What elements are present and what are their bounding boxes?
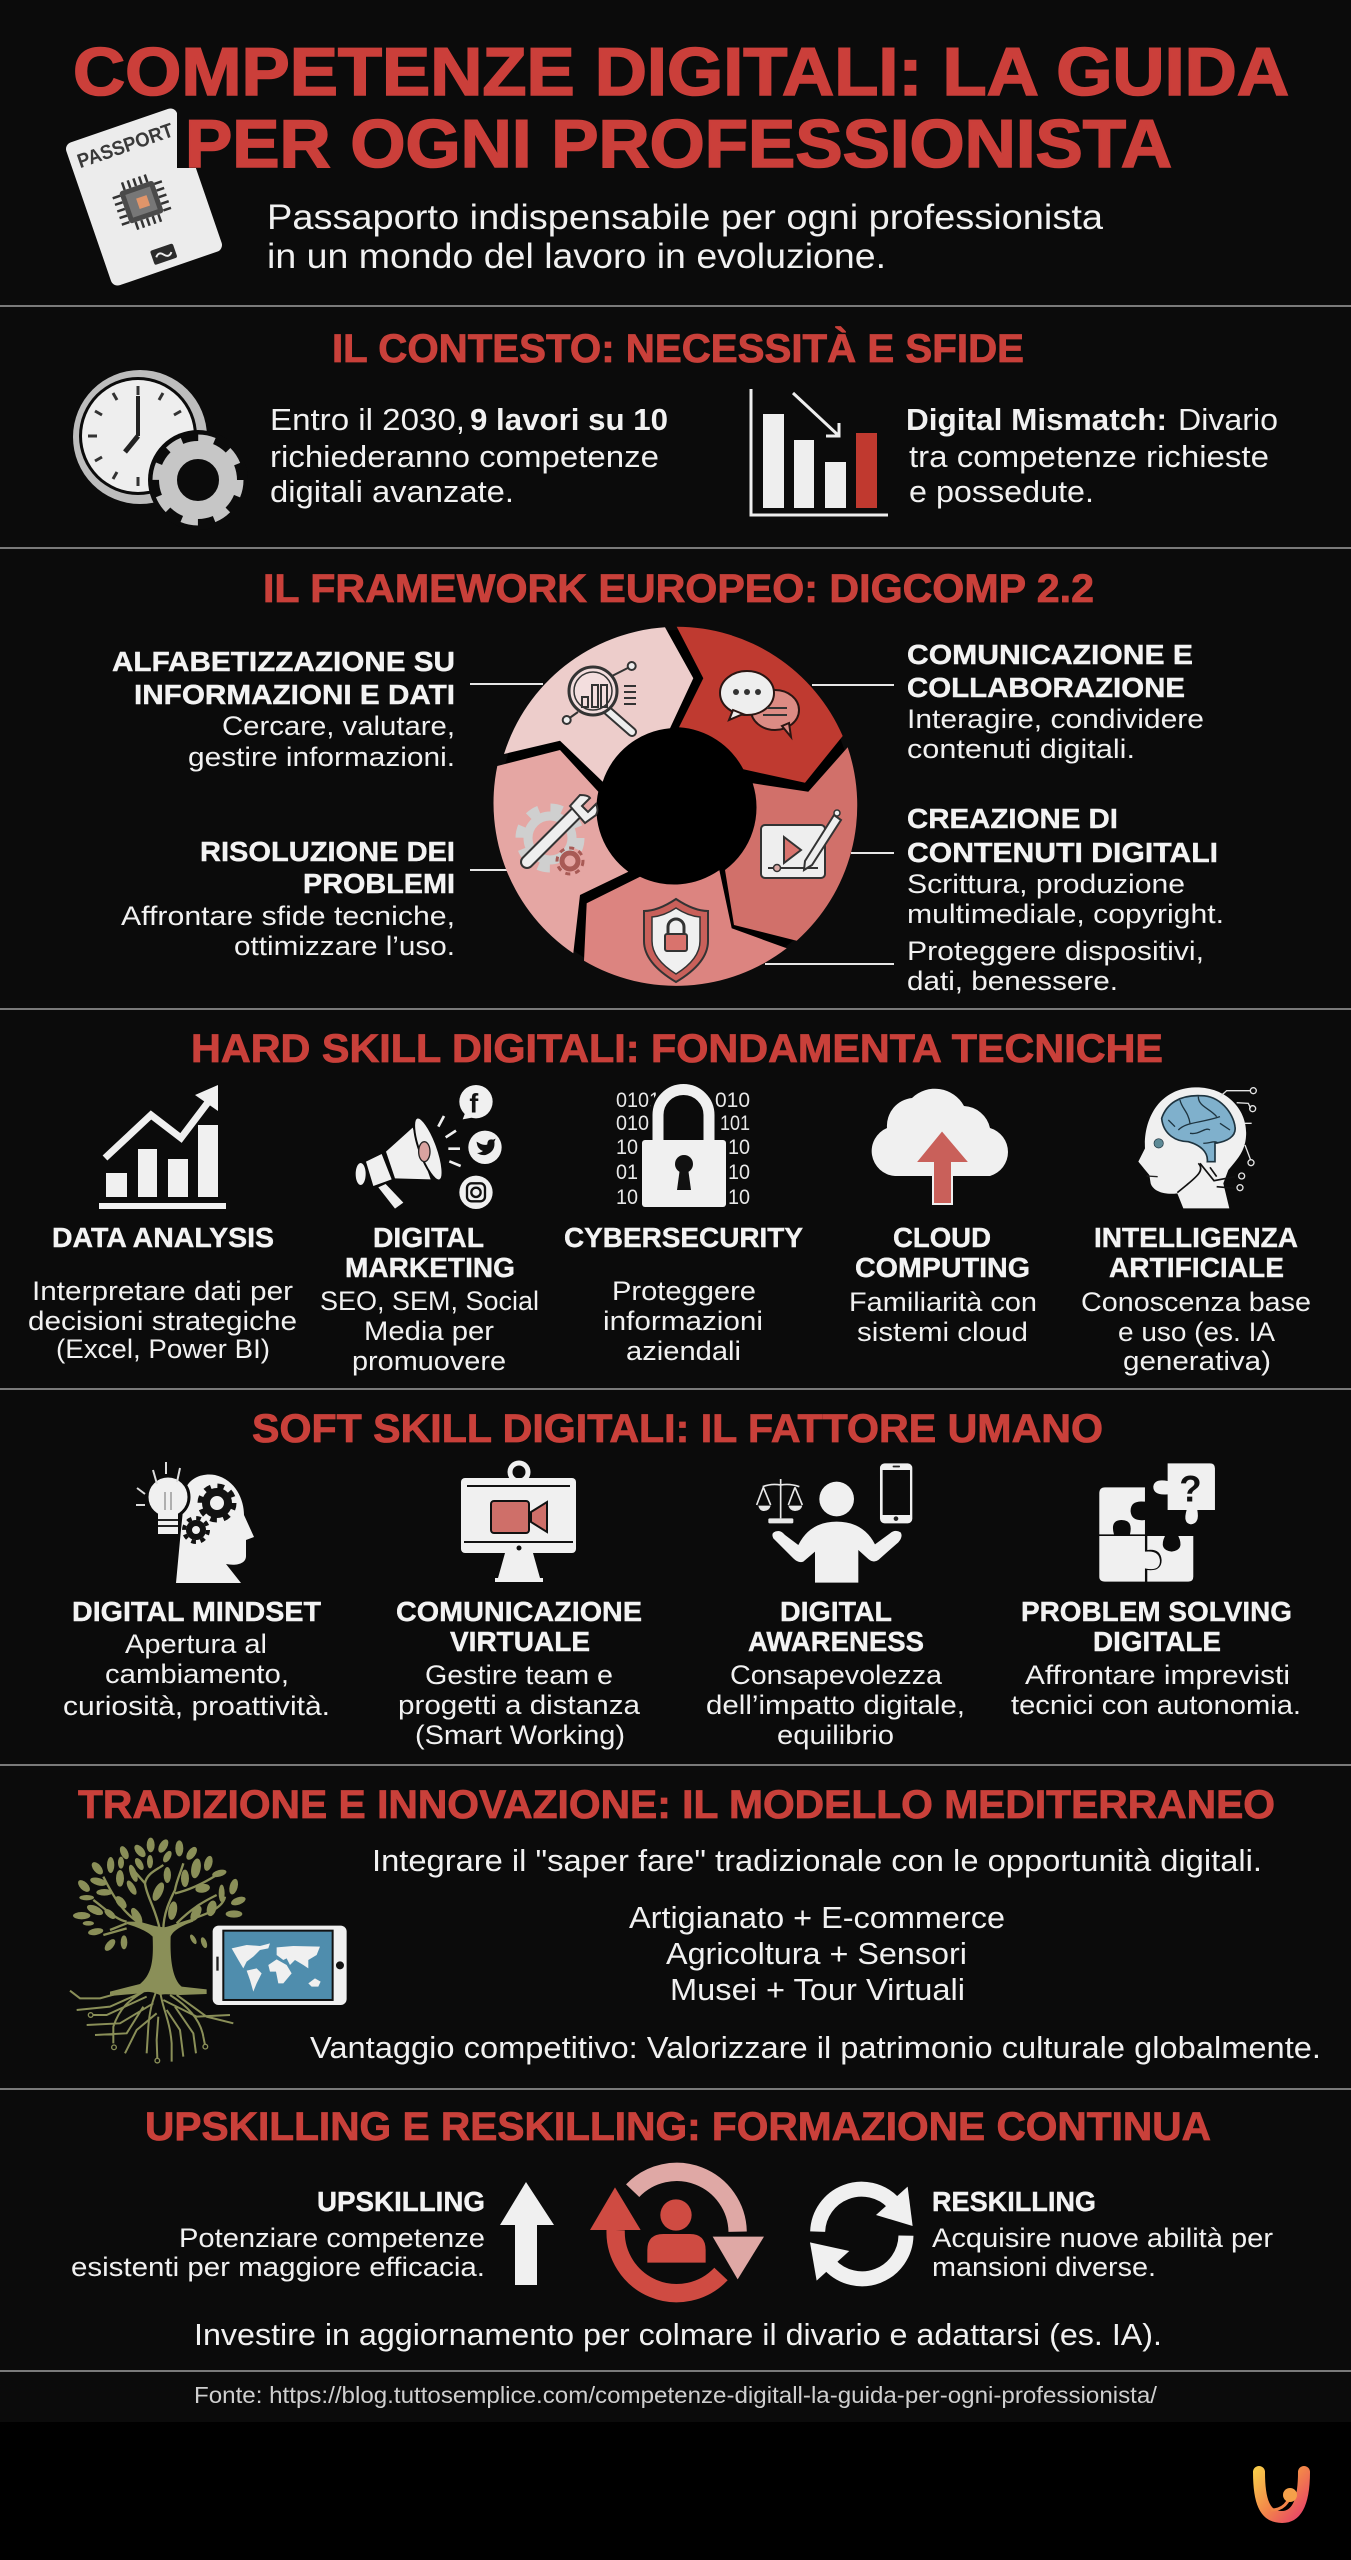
heading: upskilling: UPSKILLING E RESKILLING: FORMAZIONE CONTINUA bbox=[145, 2105, 1211, 2149]
heading: framework: IL FRAMEWORK EUROPEO: DIGCOMP 2.2 bbox=[263, 567, 1094, 611]
title: PER OGNI PROFESSIONISTA bbox=[185, 106, 1172, 182]
text: digital marketing: promuovere bbox=[352, 1346, 506, 1376]
icon: cloud upload bbox=[872, 1089, 1008, 1204]
text: digital marketing: SEO, SEM, Social bbox=[320, 1286, 539, 1316]
icon: megaphone with social bbox=[356, 1085, 502, 1209]
icon: padlock with binary: 101 bbox=[720, 1112, 750, 1135]
text: data analysis: decisioni strategiche bbox=[28, 1306, 297, 1336]
icon: magnifier with data bbox=[563, 662, 636, 732]
text: digital mismatch: tra competenze richieste bbox=[909, 439, 1269, 474]
text: combinations bbox=[629, 1900, 1005, 2007]
text: digital mismatch: Digital Mismatch: bbox=[906, 402, 1167, 437]
text: digital mismatch: Divario bbox=[1178, 402, 1278, 437]
text: cloud computing bbox=[849, 1222, 1037, 1347]
text: digital mindset: DIGITAL MINDSET bbox=[72, 1596, 321, 1627]
text: cloud computing: COMPUTING bbox=[855, 1252, 1030, 1283]
icon: monitor with video call bbox=[461, 1463, 576, 1582]
text: data analysis: Interpretare dati per bbox=[32, 1276, 293, 1306]
text: reskilling: RESKILLING bbox=[932, 2186, 1096, 2217]
text: digital awareness: DIGITAL bbox=[780, 1596, 892, 1627]
heading: tradizione: TRADIZIONE E INNOVAZIONE: IL MODELLO MEDITERRANEO bbox=[78, 1783, 1275, 1827]
label: creazione di contenuti digitali: CONTENUTI DIGITALI bbox=[907, 837, 1218, 868]
text: 2030: richiederanno competenze bbox=[270, 439, 659, 474]
text: combinations: Agricoltura + Sensori bbox=[666, 1936, 967, 1971]
icon: tablet with world map bbox=[213, 1926, 347, 2005]
text: comunicazione virtuale: COMUNICAZIONE bbox=[396, 1596, 642, 1627]
icon: clock and gear bbox=[73, 370, 248, 530]
label: creazione di contenuti digitali: Scrittura, produzione bbox=[907, 869, 1185, 899]
icon: padlock with binary: 10 bbox=[616, 1136, 638, 1159]
text: problem solving digitale: PROBLEM SOLVING bbox=[1021, 1596, 1292, 1627]
arrow: up bbox=[500, 2182, 554, 2285]
text: comunicazione virtuale bbox=[396, 1596, 642, 1750]
text: combinations: Musei + Tour Virtuali bbox=[670, 1972, 965, 2007]
text: upskilling: UPSKILLING bbox=[317, 2186, 485, 2217]
text: digital awareness bbox=[706, 1596, 965, 1750]
text: intelligenza artificiale bbox=[1081, 1222, 1311, 1376]
icon: padlock with binary: 0101 bbox=[616, 1089, 660, 1112]
panel: hard skill bbox=[28, 1027, 1311, 1376]
text: intelligenza artificiale: ARTIFICIALE bbox=[1109, 1252, 1284, 1283]
text: digital awareness: Consapevolezza bbox=[730, 1660, 943, 1690]
label: comunicazione e collaborazione: COMUNICAZIONE E bbox=[907, 639, 1193, 670]
text: digital mindset bbox=[63, 1596, 330, 1721]
text: digital mismatch: e possedute. bbox=[909, 474, 1094, 509]
text: intelligenza artificiale: Conoscenza base bbox=[1081, 1287, 1311, 1317]
title: COMPETENZE DIGITALI: LA GUIDA bbox=[73, 34, 1289, 110]
label: comunicazione e collaborazione: contenuti digitali. bbox=[907, 734, 1135, 764]
icon: megaphone with social: f bbox=[469, 1089, 478, 1119]
text: cybersecurity: informazioni bbox=[603, 1306, 763, 1336]
text: comunicazione virtuale: VIRTUALE bbox=[450, 1626, 590, 1657]
text: cybersecurity bbox=[564, 1222, 803, 1366]
label: alfabetizzazione bbox=[112, 646, 455, 772]
heading: soft skill: SOFT SKILL DIGITALI: IL FATTORE UMANO bbox=[252, 1407, 1103, 1451]
text: cloud computing: CLOUD bbox=[893, 1222, 991, 1253]
text: digital mindset: curiosità, proattività. bbox=[63, 1691, 330, 1721]
icon: olive tree with circuit roots bbox=[70, 1838, 247, 2063]
text: vantaggio competitivo: Vantaggio competitivo: Valorizzare il patrimonio culturale globalmente. bbox=[310, 2030, 1321, 2065]
text: cybersecurity: CYBERSECURITY bbox=[564, 1222, 803, 1253]
icon: wrench and gear bbox=[520, 795, 598, 874]
text: digital marketing: Media per bbox=[364, 1316, 494, 1346]
text: digital marketing bbox=[320, 1222, 539, 1376]
text: digital awareness: dell’impatto digitale, bbox=[706, 1690, 965, 1720]
icon: puzzle with question mark: ? bbox=[1179, 1469, 1202, 1510]
text: cybersecurity: Proteggere bbox=[612, 1276, 756, 1306]
icon: brand logo bbox=[1259, 2472, 1304, 2517]
label: creazione di contenuti digitali bbox=[907, 803, 1224, 929]
text: intelligenza artificiale: generativa) bbox=[1123, 1346, 1271, 1376]
icon: head with bulb and gears bbox=[136, 1462, 254, 1583]
panel: soft skill bbox=[63, 1407, 1301, 1750]
text: data analysis: (Excel, Power BI) bbox=[56, 1334, 270, 1364]
icon: chat bubbles bbox=[720, 671, 799, 737]
subtitle bbox=[267, 198, 1104, 276]
label: sicurezza: dati, benessere. bbox=[907, 966, 1118, 996]
label: risoluzione dei problemi: ottimizzare l’uso. bbox=[234, 931, 455, 961]
icon: padlock with binary: 01 bbox=[616, 1161, 638, 1184]
icon: passport bbox=[64, 100, 224, 287]
heading: hard skill: HARD SKILL DIGITALI: FONDAMENTA TECNICHE bbox=[191, 1027, 1163, 1071]
label: comunicazione e collaborazione bbox=[907, 639, 1204, 764]
label: risoluzione dei problemi: Affrontare sfide tecniche, bbox=[121, 901, 455, 931]
icon: passport: PASSPORT bbox=[75, 120, 176, 173]
icon: ai head bbox=[1138, 1087, 1256, 1208]
text: 2030: 9 lavori su 10 bbox=[470, 402, 668, 437]
text: problem solving digitale: tecnici con autonomia. bbox=[1011, 1690, 1301, 1720]
text: digital awareness: equilibrio bbox=[777, 1720, 894, 1750]
icon: padlock with binary: 010 bbox=[616, 1112, 649, 1135]
icon: padlock with binary: 10 bbox=[728, 1136, 750, 1159]
icon: shield with lock bbox=[644, 899, 708, 982]
text: intelligenza artificiale: INTELLIGENZA bbox=[1094, 1222, 1298, 1253]
text: digital mindset: cambiamento, bbox=[105, 1659, 289, 1689]
subtitle: Passaporto indispensabile per ogni professionista bbox=[267, 198, 1104, 237]
label: risoluzione dei problemi bbox=[121, 836, 455, 961]
text: reskilling bbox=[932, 2186, 1273, 2282]
text: cloud computing: Familiarità con bbox=[849, 1287, 1037, 1317]
panel: upskilling e reskilling bbox=[71, 2105, 1273, 2352]
text: 2030: Entro il 2030, bbox=[270, 402, 465, 437]
label: comunicazione e collaborazione: COLLABORAZIONE bbox=[907, 672, 1185, 703]
footer: source: Fonte: https://blog.tuttosemplice.com/competenze-digitall-la-guida-per-ogni-professionista/ bbox=[194, 2382, 1158, 2408]
text: 2030 bbox=[270, 402, 668, 509]
heading: contesto: IL CONTESTO: NECESSITÀ E SFIDE bbox=[332, 326, 1024, 371]
label: alfabetizzazione: ALFABETIZZAZIONE SU bbox=[112, 646, 455, 677]
text: combinations: Artigianato + E-commerce bbox=[629, 1900, 1005, 1935]
subtitle: in un mondo del lavoro in evoluzione. bbox=[267, 237, 886, 276]
text: upskilling: Potenziare competenze bbox=[179, 2223, 485, 2253]
icon: padlock with binary: 010 bbox=[715, 1089, 750, 1112]
text: upskilling bbox=[71, 2186, 485, 2282]
icon: puzzle with question mark bbox=[1099, 1463, 1215, 1582]
text: comunicazione virtuale: (Smart Working) bbox=[415, 1720, 625, 1750]
text: investire: Investire in aggiornamento per colmare il divario e adattarsi (es. IA). bbox=[194, 2317, 1162, 2352]
label: risoluzione dei problemi: RISOLUZIONE DEI bbox=[200, 836, 455, 867]
title bbox=[73, 34, 1289, 182]
icon: bar chart mismatch bbox=[751, 389, 888, 515]
text: reskilling: Acquisire nuove abilità per bbox=[932, 2223, 1273, 2253]
label: sicurezza: Proteggere dispositivi, bbox=[907, 936, 1204, 966]
text: comunicazione virtuale: progetti a distanza bbox=[398, 1690, 641, 1720]
text: data analysis bbox=[28, 1222, 297, 1364]
text: digital marketing: MARKETING bbox=[345, 1252, 515, 1283]
label: alfabetizzazione: gestire informazioni. bbox=[188, 742, 455, 772]
text: digital awareness: AWARENESS bbox=[748, 1626, 924, 1657]
panel: header bbox=[64, 34, 1289, 287]
connector lines bbox=[470, 684, 894, 964]
label: alfabetizzazione: INFORMAZIONI E DATI bbox=[134, 679, 455, 710]
icon: cycle with person bbox=[590, 2172, 764, 2293]
chart: ring of five segments bbox=[493, 627, 857, 986]
icon: padlock with binary: 10 bbox=[728, 1186, 750, 1209]
text: intelligenza artificiale: e uso (es. IA bbox=[1118, 1317, 1275, 1347]
icon: person balancing scale and phone bbox=[757, 1463, 912, 1583]
text: digital mismatch bbox=[906, 402, 1278, 509]
text: digital mindset: Apertura al bbox=[125, 1629, 267, 1659]
panel: digcomp framework bbox=[112, 567, 1224, 996]
icon: reskilling arrows bbox=[810, 2187, 913, 2281]
text: upskilling: esistenti per maggiore efficacia. bbox=[71, 2252, 485, 2282]
label: risoluzione dei problemi: PROBLEMI bbox=[303, 868, 455, 899]
text: problem solving digitale bbox=[1011, 1596, 1301, 1720]
panel: tradizione e innovazione bbox=[70, 1783, 1321, 2065]
label: comunicazione e collaborazione: Interagire, condividere bbox=[907, 704, 1204, 734]
panel: il contesto bbox=[73, 326, 1278, 530]
icon: data analysis chart bbox=[99, 1085, 226, 1209]
text: reskilling: mansioni diverse. bbox=[932, 2252, 1156, 2282]
text: comunicazione virtuale: Gestire team e bbox=[425, 1660, 613, 1690]
text: digital marketing: DIGITAL bbox=[373, 1222, 484, 1253]
icon: padlock with binary: 10 bbox=[728, 1161, 750, 1184]
label: sicurezza bbox=[907, 936, 1204, 996]
icon: padlock with binary bbox=[616, 1089, 750, 1209]
icon: video and pen bbox=[761, 810, 841, 878]
label: alfabetizzazione: Cercare, valutare, bbox=[222, 711, 455, 741]
text: cloud computing: sistemi cloud bbox=[857, 1317, 1028, 1347]
text: cybersecurity: aziendali bbox=[626, 1336, 741, 1366]
text: integrare: Integrare il "saper fare" tradizionale con le opportunità digitali. bbox=[372, 1843, 1262, 1878]
text: data analysis: DATA ANALYSIS bbox=[52, 1222, 274, 1253]
label: creazione di contenuti digitali: CREAZIONE DI bbox=[907, 803, 1118, 834]
label: creazione di contenuti digitali: multimediale, copyright. bbox=[907, 899, 1224, 929]
icon: padlock with binary: 10 bbox=[616, 1186, 638, 1209]
text: problem solving digitale: Affrontare imprevisti bbox=[1025, 1660, 1290, 1690]
text: 2030: digitali avanzate. bbox=[270, 474, 514, 509]
text: problem solving digitale: DIGITALE bbox=[1093, 1626, 1221, 1657]
